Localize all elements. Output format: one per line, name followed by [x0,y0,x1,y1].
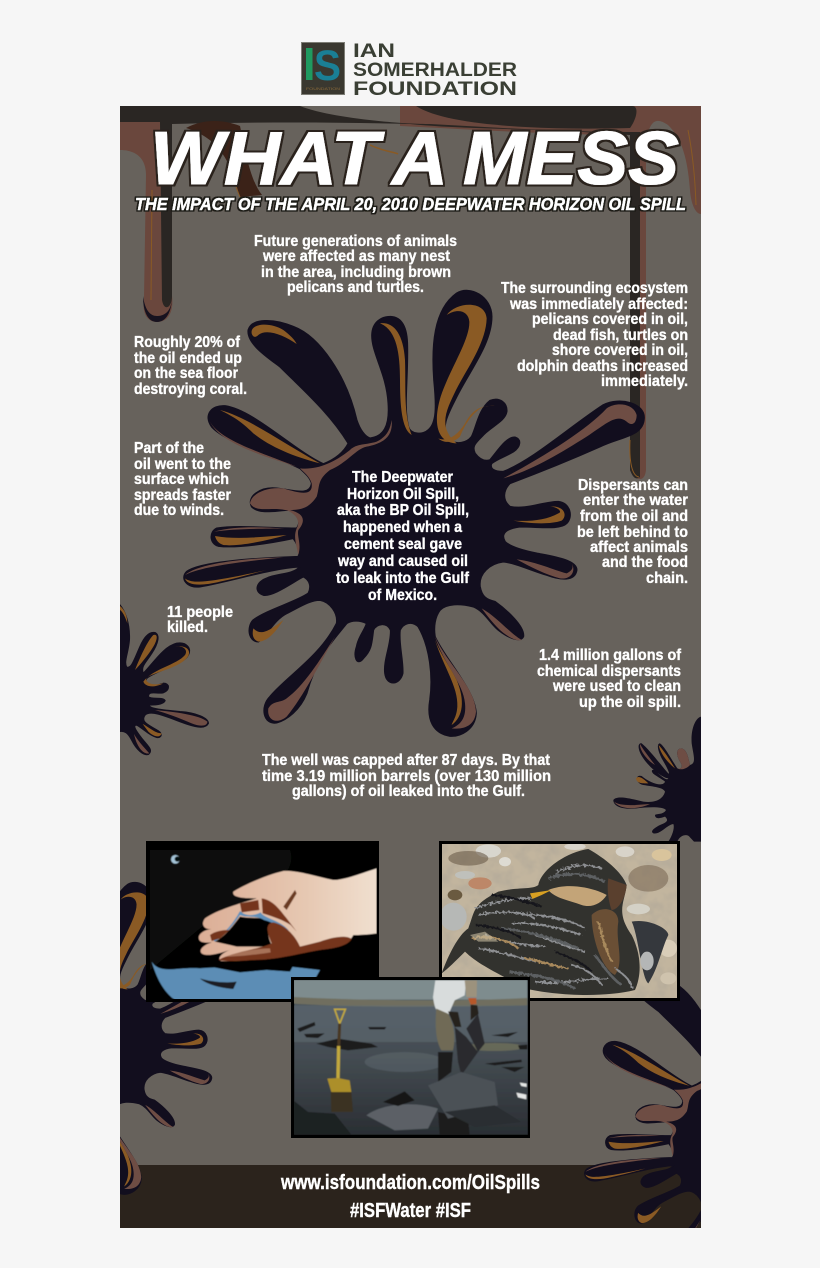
footer text: www.isfoundation.com/OilSpills [280,1172,540,1194]
dark stones [632,921,668,983]
text block: chemical dispersants: were used to clean [552,678,681,695]
splat highlights: orange and brown oil [185,305,637,729]
photo: oil-covered bird [439,841,680,1001]
text block: surface oil: Part of the [134,440,204,457]
logo: Ian Somerhalder Foundation [302,40,517,100]
text block: surface oil: spreads faster [134,487,231,504]
photo: oily hand [146,841,379,1002]
text block: surrounding ecosystem: immediately. [601,373,688,390]
text block: people killed [167,604,233,636]
title: WHAT A MESS: A [390,116,448,200]
text block: surrounding ecosystem: The surrounding ecosystem [501,280,688,297]
text block: future generations: were affected as many nest [262,248,451,265]
text block: surface oil: oil went to the [134,456,231,473]
logo wordmark: FOUNDATION [353,78,517,100]
splat body [184,291,644,736]
text block: surface oil [134,440,231,519]
main oil splat [184,291,644,736]
feather streaks [472,866,632,988]
text block: centre of splat: happened when a [343,519,462,536]
splat: lower left [120,882,212,1195]
oil slicks [297,1022,527,1072]
text block: surface oil: surface which [134,471,229,488]
splat: right middle [613,717,701,842]
text block: chemical dispersants [537,647,682,711]
text block: sea floor: destroying coral. [134,381,247,398]
worker [433,980,485,1135]
text block: dispersants: chain. [646,570,688,587]
footer band [120,1165,701,1228]
title: WHAT A MESS: WHAT [150,116,385,200]
text block: dispersants: enter the water [583,492,688,509]
text block: centre of splat: Horizon Oil Spill, [347,486,459,503]
text block: dispersants: and the food [602,554,688,571]
text block: dispersants: affect animals [590,539,688,556]
logo wordmark: IAN [353,40,395,62]
text block: centre of splat: The Deepwater [352,469,453,486]
text block: chemical dispersants: up the oil spill. [579,694,681,711]
text block: surrounding ecosystem: shore covered in oil, [552,342,688,359]
sea and shoreline [293,980,527,1000]
text block: centre of splat: cement seal gave [344,536,462,553]
text block: centre of splat: way and caused oil [337,553,468,570]
oil on hand [218,922,352,961]
text block: centre of splat [336,469,470,604]
text block: dispersants [577,477,688,587]
text block: sea floor: Roughly 20% of [134,334,241,351]
footer text [280,1172,540,1222]
text block: people killed: killed. [167,619,208,636]
text block: surface oil: due to winds. [134,502,224,519]
icon: IS foundation square: FOUNDATION [306,86,340,91]
text block: future generations: pelicans and turtles. [287,279,424,296]
text block: centre of splat: aka the BP Oil Spill, [337,502,469,519]
text block: dispersants: Dispersants can [578,477,688,494]
photo: oil cleanup worker [291,977,530,1138]
hand [199,868,377,961]
title: WHAT A MESS [150,116,679,200]
text block: centre of splat: of Mexico. [368,587,437,604]
splat: left middle [118,603,208,755]
text block: chemical dispersants: chemical dispersants [537,663,681,680]
bird body [442,849,640,995]
text block: surrounding ecosystem: dead fish, turtles on [553,327,688,344]
text block: sea floor [134,334,247,398]
icon: IS foundation square: S [314,42,341,90]
text block: surrounding ecosystem [501,280,688,390]
text block: well capped [262,752,551,800]
water reflection [152,962,320,1000]
footer text: #ISFWater #ISF [350,1200,471,1222]
plastic bags [428,1072,498,1119]
text block: surrounding ecosystem: was immediately affected: [509,296,688,313]
oil drips along top [120,106,701,479]
text block: surrounding ecosystem: dolphin deaths increased [517,358,688,375]
title: WHAT A MESS: MESS [463,116,679,200]
secondary splats clipped to panel [120,604,701,1228]
splat: lower right [584,986,701,1228]
logo wordmark: SOMERHALDER [353,59,517,81]
text block: centre of splat: to leak into the Gulf [336,570,470,587]
text block: future generations [254,233,457,296]
subtitle: THE IMPACT OF THE APRIL 20, 2010 DEEPWATER HORIZON OIL SPILL [135,194,686,214]
text block: dispersants: be left behind to [577,524,688,541]
text block: well capped: The well was capped after 87 days. By that [262,752,551,769]
text block: surrounding ecosystem: pelicans covered in oil, [532,311,688,328]
icon: IS foundation square [302,42,344,94]
text block: chemical dispersants: 1.4 million gallons of [539,647,682,664]
panel: infographic background [120,106,701,1228]
logo wordmark [353,40,517,100]
shovel [327,1009,353,1112]
text block: sea floor: the oil ended up [134,350,242,367]
text block: well capped: gallons) of oil leaked into the Gulf. [292,783,525,800]
text block: dispersants: from the oil and [580,508,688,525]
text block: sea floor: on the sea floor [134,365,238,382]
text block: well capped: time 3.19 million barrels (over 130 million [262,768,551,785]
text block: future generations: in the area, including brown [261,264,451,281]
text block: people killed: 11 people [167,604,233,621]
text block: future generations: Future generations of animals [254,233,457,250]
